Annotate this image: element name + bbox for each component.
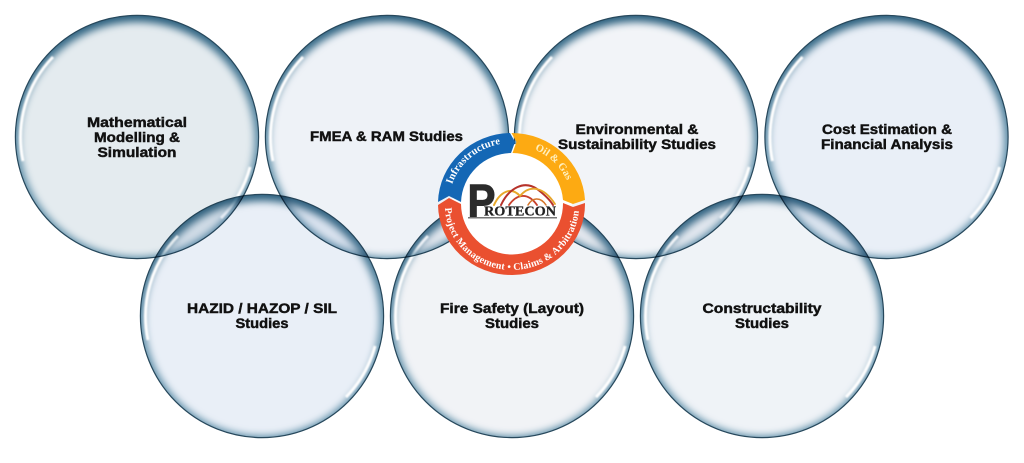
logo arcs <box>494 185 555 205</box>
label: Simulation <box>98 144 176 160</box>
label <box>187 300 337 331</box>
bubble graphic <box>140 194 384 438</box>
ring segment: Oil & Gas <box>512 133 585 204</box>
bubble graphic <box>514 15 758 259</box>
label: Sustainability Studies <box>558 136 716 152</box>
logo wordmark: ROTECON <box>484 204 556 218</box>
panel: Constructability Studies <box>640 194 884 438</box>
label: Financial Analysis <box>821 136 953 152</box>
ring segment: Project Management and Claims & Arbitration <box>438 198 585 275</box>
panel: Cost Estimation & Financial Analysis <box>764 15 1008 259</box>
label <box>440 300 584 331</box>
label: HAZID / HAZOP / SIL <box>187 300 337 316</box>
label: Constructability <box>702 300 822 316</box>
label: FMEA & RAM Studies <box>310 128 463 144</box>
Protecon logo <box>468 175 557 227</box>
bubble graphic <box>15 15 259 259</box>
bubble graphic <box>640 194 884 438</box>
label <box>558 121 716 152</box>
label: Studies <box>236 315 289 331</box>
label: Studies <box>735 315 789 331</box>
label <box>87 114 187 160</box>
panel: HAZID / HAZOP / SIL Studies <box>140 194 384 438</box>
bubble graphic <box>764 15 1008 259</box>
label: Environmental & <box>576 121 698 137</box>
panel: Environmental & Sustainability Studies <box>514 15 758 259</box>
label <box>702 300 822 331</box>
logo underline <box>468 217 557 218</box>
panel: Mathematical Modelling & Simulation <box>15 15 259 259</box>
bubble graphic <box>265 15 509 259</box>
ring segment: Infrastructure <box>438 133 515 202</box>
segment text: Oil & Gas <box>536 144 571 180</box>
centre disc <box>452 144 572 264</box>
label: Cost Estimation & <box>822 121 952 137</box>
segment text: Project Management • Claims & Arbitration <box>445 208 579 270</box>
label: Modelling & <box>94 129 180 145</box>
label: Mathematical <box>87 114 187 130</box>
label: Studies <box>485 315 539 331</box>
panel: Fire Safety (Layout) Studies <box>390 194 634 438</box>
bubble graphic <box>390 194 634 438</box>
panel: FMEA & RAM Studies <box>265 15 509 259</box>
segment text: Infrastructure <box>446 140 500 184</box>
logo letter P: P <box>468 175 496 227</box>
label <box>821 121 953 152</box>
label: Fire Safety (Layout) <box>440 300 584 316</box>
central logo ring <box>438 133 585 275</box>
